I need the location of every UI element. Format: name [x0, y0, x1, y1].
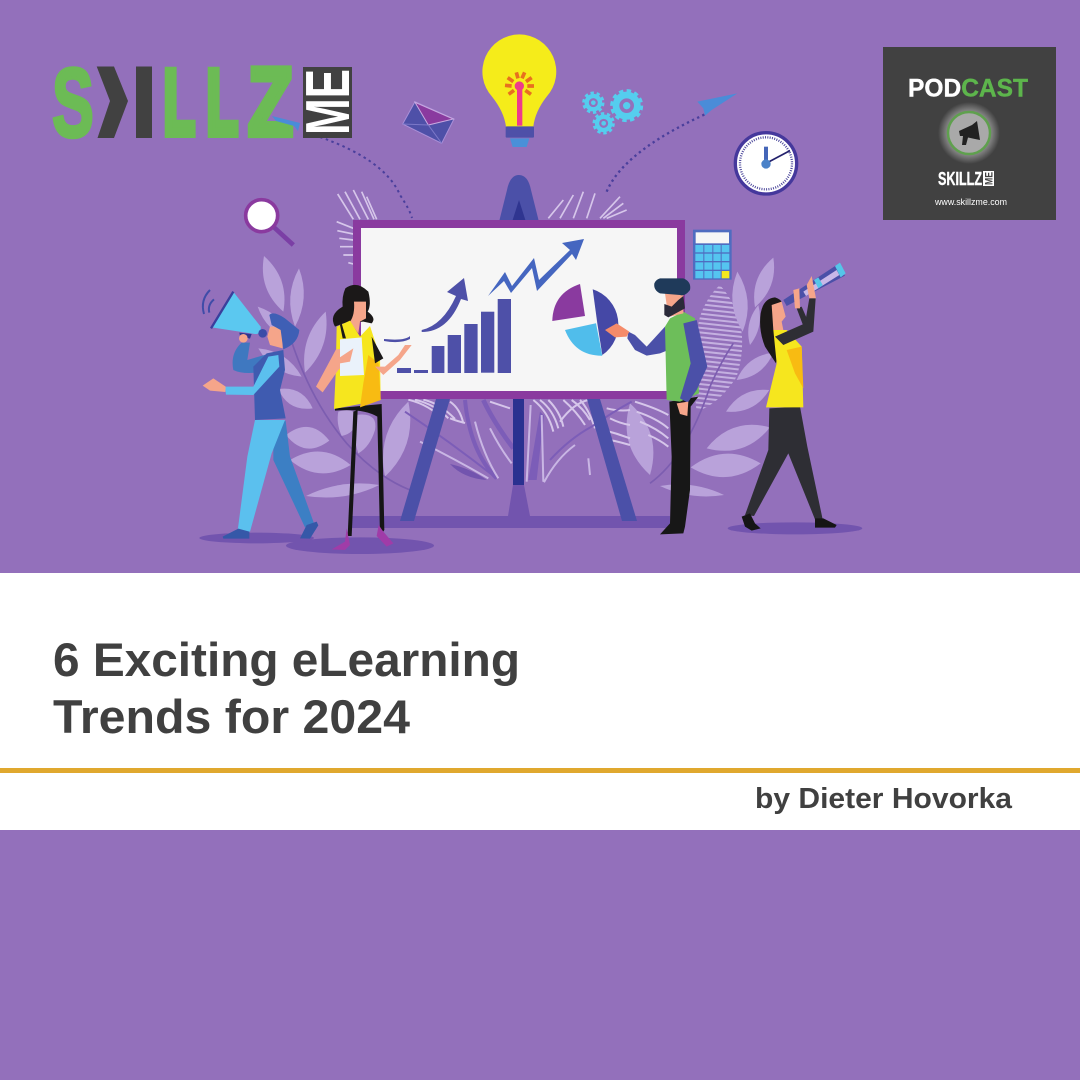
calculator icon	[693, 230, 732, 280]
dotted flight path	[607, 114, 705, 192]
podcast small logo: SKILLZ	[938, 169, 982, 189]
plant behind right side	[548, 192, 774, 496]
small plane on the logo	[272, 116, 300, 131]
illustration: presentation scene	[199, 34, 862, 554]
clock icon	[735, 133, 797, 194]
author byline: by Dieter Hovorka	[755, 783, 1013, 815]
easel centre post	[513, 399, 524, 485]
logo letter L: L	[164, 51, 195, 154]
easel right leg	[587, 399, 637, 521]
paper plane icon	[697, 93, 737, 116]
bar chart	[384, 299, 511, 373]
podcast label: PODCAST	[908, 74, 1028, 102]
logo letter I	[136, 66, 152, 138]
person: man presenting	[605, 278, 707, 534]
logo: SKILLZ ME	[52, 48, 363, 158]
pie chart	[552, 284, 618, 356]
lightbulb icon	[482, 34, 556, 147]
presentation board	[353, 220, 685, 399]
easel left leg	[400, 399, 450, 521]
person: woman with telescope	[728, 263, 862, 534]
podcast url: www.skillzme.com	[934, 197, 1007, 207]
gears icon	[584, 91, 641, 133]
white title band	[0, 573, 1080, 830]
plant behind left side	[258, 190, 410, 498]
top icons and dotted lines	[403, 34, 797, 194]
easel	[352, 175, 670, 528]
easel top	[499, 175, 539, 222]
logo letter L: L	[206, 51, 238, 154]
fronds under the board centre	[405, 400, 668, 482]
dotted path from logo	[320, 137, 412, 218]
logo letter S: S	[52, 50, 94, 158]
person: man with megaphone	[199, 290, 434, 554]
title: Trends for 2024	[53, 690, 410, 743]
magnifying glass icon	[246, 200, 293, 245]
title: 6 Exciting eLearning	[53, 633, 520, 686]
logo letter Z: Z	[248, 48, 293, 156]
easel base bar	[352, 516, 670, 528]
person: woman with paper	[316, 285, 412, 550]
megaphone badge icon	[938, 102, 1000, 164]
podcast small logo ME box: ME	[984, 172, 996, 185]
gold divider	[0, 768, 1080, 773]
envelope icon	[403, 102, 454, 143]
curved growth arrow	[422, 278, 468, 332]
logo chevron K	[97, 66, 128, 138]
zigzag growth arrow	[488, 239, 584, 296]
logo ME box: ME	[294, 69, 363, 135]
podcast badge	[883, 47, 1056, 220]
